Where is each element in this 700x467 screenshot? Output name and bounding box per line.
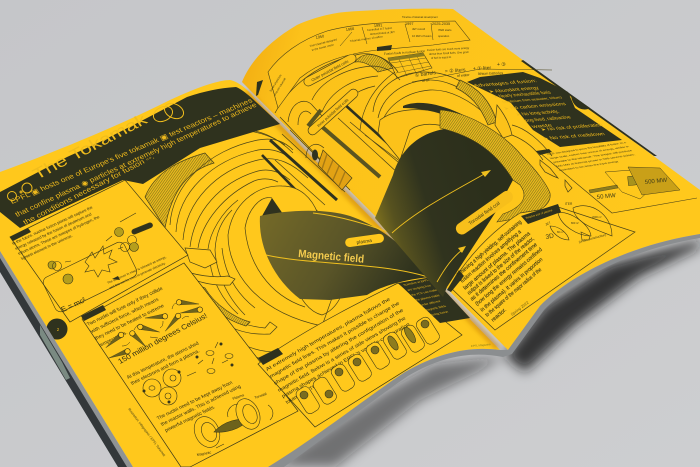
icon: tokamak rings: [151, 100, 186, 125]
step 2 text: Two nuclei will fuse only if they collide: [86, 286, 164, 328]
right page dark top edge: [521, 60, 657, 156]
credit: Illustration: Infographic / EPFL Tokamak: [127, 407, 167, 458]
fuels note: Fusion fuels are much more energy: [427, 46, 470, 52]
front ring: [228, 186, 332, 326]
label: plasma pill: plasma: [356, 238, 373, 246]
panel: step 3 plasma shapes: [258, 277, 470, 427]
timeline notes: Soviet physicists: [268, 73, 283, 93]
dark callout: Scientists at EPFL: [402, 278, 430, 287]
500 MW block: [628, 167, 680, 195]
left page illustration: tokamak coils: [145, 130, 345, 360]
step 3 text: shape of the plasma by altering the configuration of the: [273, 308, 405, 387]
book shadow: [272, 240, 700, 467]
plasma shape cards: [294, 315, 441, 416]
label: magnetic field: Magnetic field: [298, 248, 365, 266]
size labels: 3D: [545, 233, 555, 241]
years: [315, 22, 450, 40]
dark strips: [320, 125, 380, 177]
ITER text: [546, 141, 636, 172]
panel: advantages of fusion: [467, 72, 622, 147]
size labels: ITER: [565, 202, 573, 206]
mini tokamak diagram: Magnetic: [196, 450, 212, 457]
inset text: energy released by the fusion of deuterium and: [14, 212, 92, 251]
mini tokamak diagram: Toroidal: [254, 392, 267, 400]
atoms diagram: [143, 342, 233, 405]
inner poloidal field coils pill: [306, 87, 360, 137]
50 MW bar: [589, 185, 618, 193]
left page header banner: [0, 87, 280, 228]
timeline notes: Timeline of tokamak development: [402, 16, 438, 19]
timeline notes: propose tokamak: [272, 76, 287, 97]
advantages list: ➤ No carbon emissions: [503, 102, 568, 112]
ITER text: large-scale, carbon-free source of energy, similar in: [549, 145, 630, 160]
toroidal field coil pill: Toroidal field coil: [468, 201, 501, 227]
ITER text: principle to the tokamak. The project will produce: [552, 149, 633, 164]
label: plasma pill: [345, 233, 385, 248]
panel: step 4 tokamak scale: [447, 202, 635, 330]
side blocks: [540, 160, 558, 178]
advantages list: ➤ No risk of proliferation: [540, 123, 605, 133]
years: 1997: [405, 22, 413, 26]
years: 1968: [346, 27, 355, 32]
fuels note: dense than fossil fuels. One gram: [429, 50, 470, 56]
step tag 3: [258, 348, 283, 365]
toroidal field coil pill: [454, 189, 515, 237]
advantages list: [473, 79, 607, 142]
panel: step 2 nuclei: [81, 263, 298, 467]
advantages list: ➤ Nearly inexhaustible fuels: [493, 90, 553, 100]
plasma on left page: [260, 198, 430, 300]
fusion equation: [414, 62, 506, 83]
step 4 text: in the plasma). It varies in proportion: [480, 257, 544, 314]
cap blocks: [185, 248, 217, 268]
lower coil arcs: [210, 248, 255, 315]
fusion equation: + ③: [497, 62, 506, 68]
advantages list: ➤ No long-activity,: [515, 109, 561, 118]
step 4 text: to the square of the major radius of the: [485, 267, 543, 319]
size labels: 800 m³: [571, 221, 579, 225]
mass difference text: and this can be used to generate electricity.: [108, 261, 167, 290]
intro text: the conditions necessary for fusion ◦◦.: [21, 152, 156, 227]
step 2 text: [86, 286, 166, 349]
step tag 1: [10, 228, 31, 241]
timeline notes: Controlled D-T fusion: [367, 26, 393, 32]
right page: [242, 9, 700, 350]
years: 1950: [315, 34, 324, 40]
plasma text: At this temperature, the atoms shed: [126, 341, 200, 381]
title: The Tokamak: [30, 112, 150, 183]
dark callout: during fusion: [429, 310, 449, 317]
heated nuclei: [104, 299, 203, 361]
right page illustration: coils: [275, 54, 572, 192]
plasma size lenses: [550, 206, 612, 240]
step 4 text: reactor.: [491, 307, 508, 324]
icon: nuclei: [8, 183, 32, 200]
size labels: 80 m³: [557, 230, 564, 234]
fusion fuels table: [377, 45, 552, 83]
advantages list: ➤ No risk of meltdown: [542, 132, 607, 142]
step 4 text: Achieving a high-yielding, self-sustaining: [456, 219, 523, 279]
dark strips: [270, 140, 337, 200]
page stack: [0, 234, 700, 467]
panel: fusion reaction inset: [10, 180, 188, 322]
page number dot: [46, 318, 68, 340]
advantages list: Advantages of fusion:: [473, 79, 539, 89]
intro text: that confine plasma ◉ particles at extremely high temperatures to achieve: [13, 100, 258, 219]
panel: ITER facts: 50 MW: [597, 193, 616, 201]
advantages list: ➤ Abundant energy: [488, 86, 541, 95]
inset text: In the future, nuclear fusion plants will capture the: [11, 204, 94, 246]
step 4 text: large amount of plasma. The plasma: [463, 230, 532, 292]
dark tag: Relative size of plasma: [525, 208, 553, 220]
toroidal field darkness on right page: [375, 128, 513, 297]
step 4 text: output is linked to the size of the reactor,: [467, 236, 536, 297]
advantages list: (deuterium from seawater, tritium): [501, 96, 564, 104]
dark tab: [571, 95, 590, 109]
advantages list: long-lived, radioactive: [523, 115, 573, 124]
left page: [0, 80, 500, 467]
coil tube: [312, 150, 318, 160]
timeline notes: First tokamak designed: [309, 37, 338, 48]
plasma text: their electrons and form a plasma.: [130, 348, 201, 387]
timeline notes: [268, 16, 452, 97]
history timeline table: [256, 16, 470, 108]
step 3 text: magnetic field lines. This makes it possible to change the: [269, 301, 401, 380]
ITER text: ITER was designed to prove the feasibility of fusion as a: [546, 141, 627, 156]
fuels note: of fuel is equal to: [431, 55, 452, 60]
magnetic field text: powerful magnetic fields.: [164, 405, 217, 434]
fusion equation: of water: [457, 73, 471, 78]
outer poloidal field coils pill: Outer poloidal field coils: [310, 59, 349, 82]
intro text: EPFL ▣ hosts one of Europe's five tokamak ▣ test reactors – machines: [9, 97, 255, 206]
magnetic field lines: [266, 213, 428, 277]
dark callout: magnetic fields: [424, 304, 447, 312]
dark callout: [398, 277, 470, 323]
step tag 4: [447, 270, 464, 292]
dark arc and hatched band: [403, 103, 550, 222]
step tag 2: [81, 305, 106, 321]
inner poloidal field coils pill: Inner poloidal field coils: [316, 97, 349, 128]
inset text: [11, 204, 101, 261]
dark callout: under different: [419, 299, 441, 307]
equation: E = mc²: [59, 295, 88, 314]
ITER text: equivalent to ten times the input energy: [558, 160, 620, 172]
timeline notes: 16 MW of fusion: [412, 34, 432, 38]
bottom credit: EPFL Magazine: [471, 342, 491, 348]
step 4 text: fusion reaction involves amplifying a: [460, 229, 523, 285]
fusion equation: ① barrels: [414, 70, 437, 79]
step 3 text: At extremely high temperatures, plasma follows the: [265, 297, 392, 373]
ITER text: 500 MW of thermal power in 500-second pulses,: [555, 153, 636, 168]
step 4 text: (how long the energy remains confined: [475, 247, 544, 308]
years: 1991: [374, 23, 383, 28]
step 2 text: they need to be heated to extreme: [94, 303, 166, 342]
spine shade: [246, 92, 498, 348]
page number dot: 2: [57, 327, 60, 332]
timeline notes: Tokamak reaches 10 million: [350, 34, 383, 43]
inset text: tritium atoms. These are isotopes of hydrogen, the: [17, 214, 101, 256]
step tag 5: [536, 149, 552, 155]
magnetic field text: The nuclei need to be kept away from: [156, 380, 234, 422]
dark callout: the TCV can make: [410, 288, 438, 297]
step 3 text: tokamak, or TCV.: [285, 382, 321, 406]
fusion equation: lithium batteries: [478, 71, 503, 76]
dark tag: [521, 204, 561, 224]
advantages list: waste: [529, 123, 554, 130]
size labels: (under construction): [578, 233, 607, 244]
fusion equation: = ② liters: [445, 67, 466, 75]
dark callout: are studying how: [406, 284, 432, 292]
fusion equation: + ① liter: [473, 65, 492, 72]
hatched back coil: [145, 153, 214, 228]
years: 2025-2035: [432, 22, 450, 26]
size labels: [544, 202, 607, 244]
inset text: lightest element in the universe.: [20, 233, 74, 261]
issue credit: Spring 2022: [510, 300, 530, 317]
step 4 text: [456, 219, 544, 324]
dark callout: the plasma stable: [414, 293, 441, 302]
timeline notes: operation: [438, 34, 450, 38]
mini tokamak diagram: Plasma: [232, 393, 245, 401]
fusion equation: of oil: [422, 78, 430, 83]
timeline notes: demonstrated at JET: [370, 30, 395, 36]
timeline notes: in the Soviet Union: [311, 43, 335, 52]
150 million label: 150 million degrees Celsius!: [116, 311, 209, 366]
fusion diagram: [41, 213, 153, 314]
panel: ITER facts: 500 MW: [645, 178, 668, 186]
step tag: [256, 80, 263, 96]
step 3 text: plasma shapes achieved in EPFL's variable-configuration: [281, 322, 411, 400]
mini tokamak diagram: [189, 392, 273, 457]
mass difference text: The difference in mass is released as energy,: [106, 255, 167, 285]
step 2 text: with sufficient force, which means: [90, 297, 160, 335]
magnetic field text: the reactor walls. This is achieved using: [160, 384, 243, 428]
step 2 text: temperatures.: [98, 330, 129, 349]
step 3 text: [265, 297, 411, 406]
upper hatched block: [456, 80, 497, 125]
striped coil end: [318, 150, 352, 190]
field arrows: [392, 173, 486, 233]
panel: ITER facts: [536, 141, 697, 213]
timeline notes: ITER starts: [438, 28, 452, 32]
size labels: JET: [544, 221, 551, 227]
size labels: 2000 m³: [592, 215, 602, 219]
step 3 text: magnetic field. Below is a series of side views showing the: [277, 316, 407, 394]
timeline notes: JET record: [412, 27, 426, 31]
outer poloidal field coils pill: [302, 52, 358, 88]
reactor cross section: [605, 170, 650, 199]
plain tube band: [378, 110, 480, 160]
step 4 text: as it determines the confinement time: [470, 242, 539, 303]
fusion fuels table: Fusion fuels in nuclear fusion: [384, 49, 425, 56]
fuels note: [427, 46, 470, 60]
